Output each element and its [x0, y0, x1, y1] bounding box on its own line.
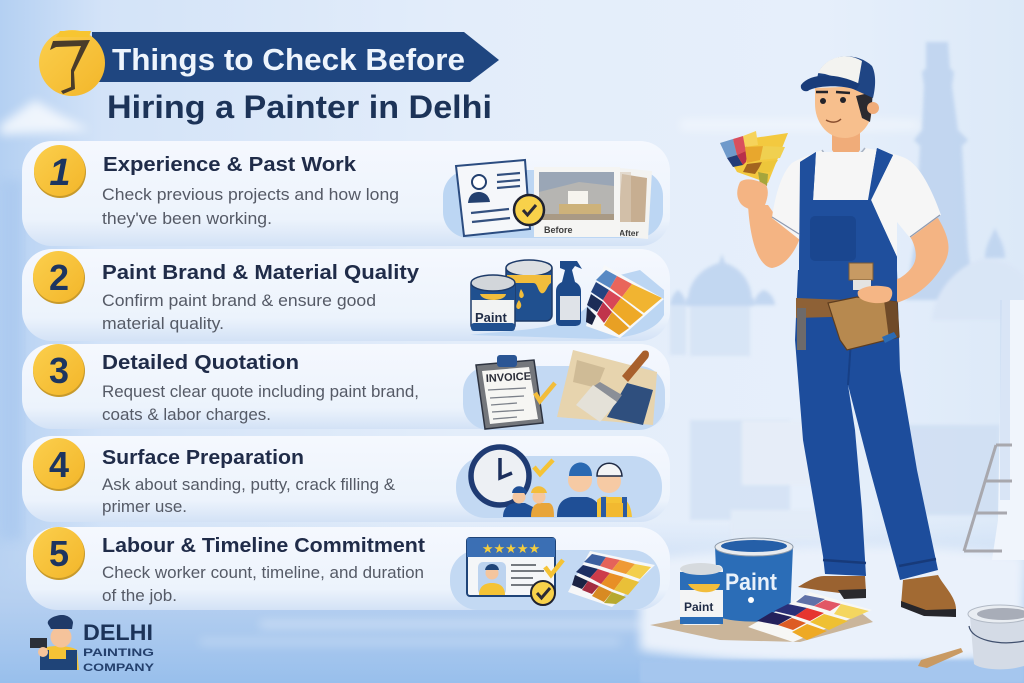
description 1: [102, 186, 399, 228]
icon: resume and before after photos: Before: [544, 225, 573, 235]
wordmark: COMPANY: [83, 662, 155, 674]
overalls bib: [798, 148, 897, 305]
row 4: [22, 436, 670, 522]
tool belt: [796, 297, 899, 350]
painter: [720, 56, 956, 617]
paint cans and swatch on floor: [680, 538, 872, 642]
description 4: [102, 476, 395, 516]
large paint can: [715, 538, 793, 622]
description 2: [102, 292, 376, 333]
badge 3: [33, 344, 85, 397]
description 5: Check worker count, timeline, and duration: [102, 564, 424, 582]
badge 2: [33, 251, 85, 304]
cap: [801, 56, 875, 98]
description 3: coats & labor charges.: [102, 406, 271, 424]
ladder: [964, 445, 1012, 551]
title banner: [92, 32, 499, 82]
arm right: [875, 218, 949, 304]
wordmark: [83, 620, 155, 674]
row 5: [26, 527, 670, 610]
badge 1: [34, 145, 86, 198]
logo: Delhi Painting Company: [30, 615, 155, 674]
badge 4: [33, 438, 85, 491]
badge 3: 3: [49, 350, 69, 391]
icon: logo painter: [30, 615, 79, 670]
hand holding fan: [737, 179, 768, 210]
brush and hand: [849, 263, 892, 303]
badge 4: 4: [49, 444, 69, 485]
wordmark: DELHI: [83, 620, 153, 645]
icon: invoice clipboard and paint brush: INVOICE: [486, 371, 531, 385]
paint fan held in hand: [720, 131, 788, 186]
description 3: [102, 383, 419, 424]
badge 2: 2: [49, 257, 69, 298]
icon: resume and before after photos: [443, 160, 663, 239]
description 2: Confirm paint brand & ensure good: [102, 292, 376, 310]
background skyline: minaret and domes: [670, 42, 1024, 540]
badge 5: [33, 527, 85, 580]
legs: [795, 270, 938, 580]
floor cloth: [650, 612, 873, 642]
badge 1: 1: [49, 152, 71, 194]
icon: rated profile card and swatches: ★★★★★: [482, 541, 540, 556]
badge 5: 5: [49, 533, 69, 574]
description 4: Ask about sanding, putty, crack filling &: [102, 476, 395, 494]
wordmark: PAINTING: [83, 647, 154, 659]
row 2: [22, 249, 670, 341]
heading 1: Experience & Past Work: [103, 154, 357, 176]
neck: [832, 128, 860, 158]
floor swatch: [748, 592, 872, 642]
title banner: Things to Check Before: [112, 42, 465, 77]
small paint can: Paint: [684, 600, 713, 614]
description 3: Request clear quote including paint brand,: [102, 383, 419, 401]
description 1: they've been working.: [102, 210, 272, 228]
head: [815, 86, 879, 138]
heading 5: Labour & Timeline Commitment: [102, 535, 425, 557]
arm left: [748, 205, 800, 268]
row 1: [22, 141, 670, 246]
white curtain at right: [992, 300, 1024, 560]
icon: paint cans, spray bottle and swatches: [470, 260, 664, 339]
description 5: [102, 564, 424, 605]
icon: rated profile card and swatches: [450, 538, 660, 610]
row 3: [22, 344, 670, 430]
title badge: 7: [39, 30, 105, 96]
small paint can: [680, 563, 723, 625]
description 1: Check previous projects and how long: [102, 186, 399, 204]
title line 2: Hiring a Painter in Delhi: [107, 89, 492, 125]
bucket and scraper at bottom right: [918, 605, 1024, 669]
t-shirt: [772, 148, 941, 256]
icon: invoice clipboard and paint brush: [463, 350, 665, 430]
icon: clock and workers: [456, 447, 662, 518]
description 2: material quality.: [102, 315, 224, 333]
boots: [798, 575, 956, 617]
description 4: primer use.: [102, 498, 187, 516]
heading 3: Detailed Quotation: [102, 352, 299, 374]
description 5: of the job.: [102, 587, 177, 605]
heading 4: Surface Preparation: [102, 447, 304, 469]
large paint can: Paint: [725, 569, 777, 596]
icon: resume and before after photos: After: [619, 228, 640, 238]
icon: paint cans, spray bottle and swatches: Paint: [475, 310, 507, 325]
heading 2: Paint Brand & Material Quality: [102, 262, 420, 284]
